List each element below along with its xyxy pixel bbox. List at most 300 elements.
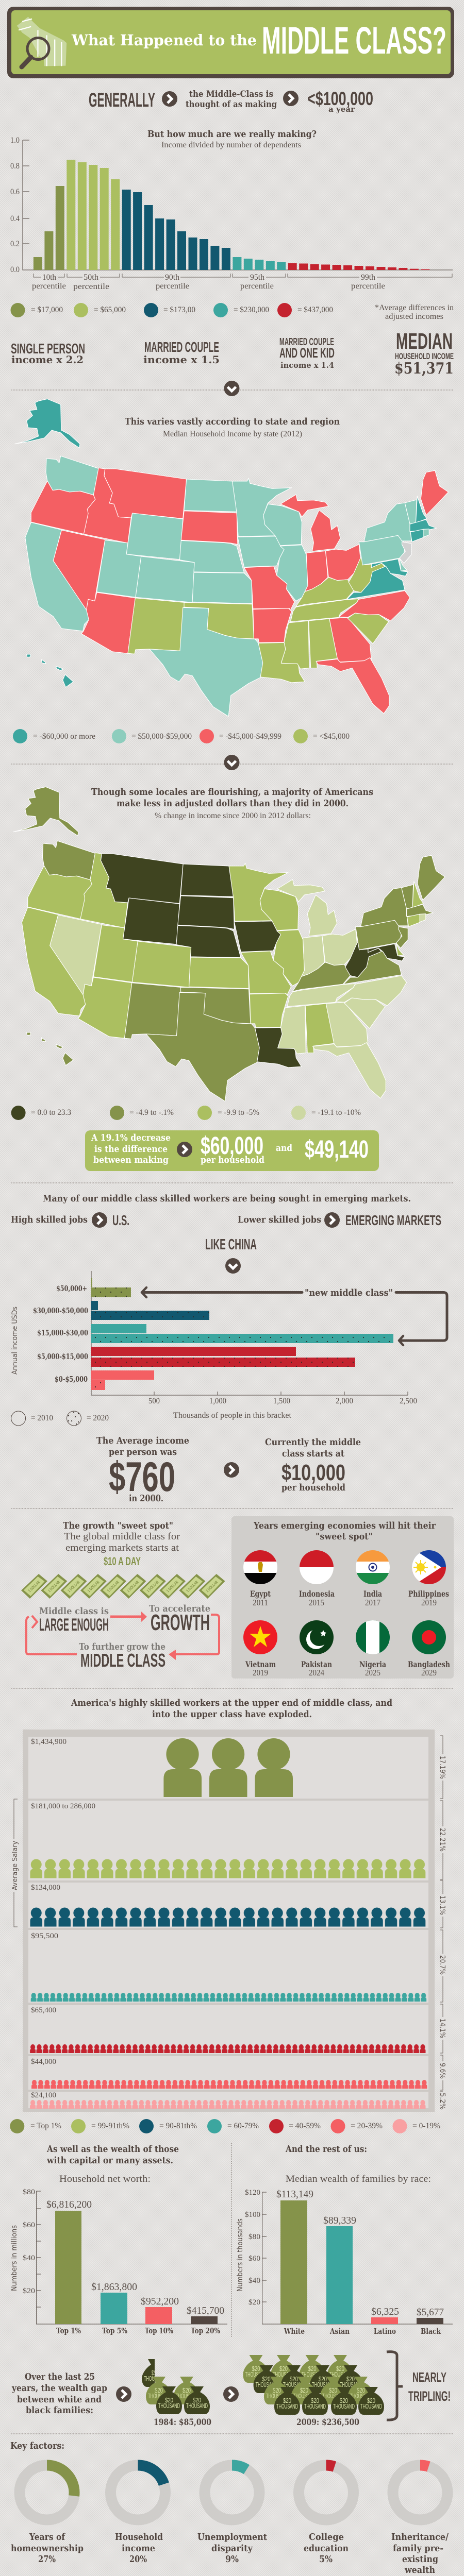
legend: percentile income: *Average differences in xyxy=(375,303,454,312)
salary brackets and percentages: 9.6% xyxy=(438,2063,446,2079)
icon: money bags 2009: THOUSAND xyxy=(340,2381,361,2388)
jobs comparison row: High skilled jobs xyxy=(11,1214,88,1225)
text: wealth gap intro xyxy=(11,2371,107,2416)
callout: 19.1 percent decrease: $60,000 xyxy=(201,1132,263,1160)
salary brackets and percentages xyxy=(11,1736,446,2110)
callout: 19.1 percent decrease: is the difference xyxy=(94,1144,168,1155)
flag: Philippines xyxy=(412,1550,446,1584)
bar chart: median wealth by race xyxy=(236,2144,453,2336)
bar chart: income percentiles: 0.8 xyxy=(10,162,20,171)
bar chart: income percentiles: 10th xyxy=(42,273,56,282)
icon: ten dollar bills: 1 DOLLAR xyxy=(27,1580,41,1593)
legend: state income: = <$45,000 xyxy=(313,732,350,741)
bar chart: China income brackets: $30,000-$50,000 xyxy=(33,1306,88,1315)
donut: household income: Household xyxy=(115,2532,163,2543)
legend: state income: = -$45,000-$49,999 xyxy=(219,732,281,741)
bar chart: China income brackets xyxy=(11,1271,417,1420)
growth cycle flow xyxy=(26,1603,219,1671)
growth cycle flow: MIDDLE CLASS xyxy=(80,1650,165,1671)
donut: unemployment disparity: 9% xyxy=(225,2554,239,2565)
icon: money bags 2009: $20 xyxy=(308,2365,317,2372)
icon: money bags 2009: $20 xyxy=(346,2375,355,2383)
icon: money bags 1984: THOUSAND xyxy=(158,2402,180,2410)
header banner xyxy=(7,7,454,78)
icon: money bags 2009: THOUSAND xyxy=(283,2381,305,2388)
definition row: generally under 100k xyxy=(89,88,373,114)
donut: college education: College xyxy=(309,2532,344,2543)
icon: money bags 2009: THOUSAND xyxy=(293,2392,315,2400)
icon: money bags 2009: $20 xyxy=(311,2397,319,2404)
bar chart: income percentiles: percentile xyxy=(156,282,189,291)
household multipliers: income x 2.2 xyxy=(11,353,84,366)
bar chart: median wealth by race: Black xyxy=(421,2327,441,2336)
icon: ten dollar bills: 1 DOLLAR xyxy=(67,1580,80,1593)
icon: money bags 2009: THOUSAND xyxy=(276,2402,298,2410)
icon: ten dollar bills: 1 DOLLAR xyxy=(47,1580,61,1593)
map: percent change in income xyxy=(13,787,445,1101)
bar chart: China income brackets: $0-$5,000 xyxy=(55,1375,88,1384)
legend: percent change: = -4.9 to -.1% xyxy=(129,1108,174,1117)
arrow: 760 to 10000 xyxy=(224,1462,239,1478)
heading: adjusted dollars: % change in income since 2000 in 2012 dollars: xyxy=(155,811,311,820)
icon: money bags 2009: THOUSAND xyxy=(266,2392,288,2400)
donut: household income: 20% xyxy=(129,2554,147,2565)
bar chart: household net worth: Top 20% xyxy=(191,2326,220,2335)
flag: Indonesia xyxy=(300,1550,334,1584)
donut: unemployment disparity xyxy=(197,2465,268,2565)
panel: emerging economies flags: Philippines xyxy=(408,1589,449,1599)
stat: average income 760: $760 xyxy=(109,1454,175,1500)
text: wealth gap intro: between white and xyxy=(17,2394,102,2405)
legend: 2010 and 2020: = 2010 xyxy=(31,1414,53,1422)
icon: money bags 2009: THOUSAND xyxy=(256,2381,277,2388)
panel: emerging economies flags: Nigeria xyxy=(359,1659,386,1669)
salary brackets and percentages: 5.2% xyxy=(438,2093,446,2110)
bar chart: China income brackets: 2,500 xyxy=(400,1397,417,1405)
bar chart: China income brackets: Annual income USDs xyxy=(11,1307,19,1375)
bar chart: median wealth by race: $40 xyxy=(248,2277,260,2285)
donut: inheritance: existing xyxy=(402,2554,438,2565)
icon: money bags 1984 xyxy=(142,2359,211,2428)
panel: emerging economies flags: 2019 xyxy=(421,1598,437,1607)
icon: money bags 1984: $20 xyxy=(193,2396,201,2404)
icon: ten dollar bills: 1 DOLLAR xyxy=(185,1580,199,1593)
legend: salary percentiles: = 90-81th% xyxy=(159,2122,197,2130)
donut: inheritance: Inheritance/ xyxy=(391,2532,449,2543)
jobs comparison row: U.S. xyxy=(112,1212,129,1228)
salary brackets and percentages: 14.1% xyxy=(438,2019,446,2038)
heading: state and region: Median Household Income by state (2012) xyxy=(163,430,302,438)
legend: percent change: = -9.9 to -5% xyxy=(218,1108,259,1117)
heading: adjusted dollars: make less in adjusted dollars than they did in 2000. xyxy=(117,798,349,809)
bar chart: household net worth: Household net worth: xyxy=(59,2174,151,2184)
panel: sweet spot growth: The growth "sweet spot" xyxy=(63,1520,173,1531)
icon: money bags 2009: THOUSAND xyxy=(333,2402,355,2410)
bar chart: household net worth: Top 5% xyxy=(102,2326,127,2335)
panel: salary pictogram: $134,000 xyxy=(31,1884,60,1892)
panel: emerging economies flags xyxy=(231,1516,454,1679)
bar chart: household net worth: As well as the wealth of those xyxy=(46,2144,179,2155)
bar chart: median wealth by race: $5,677 xyxy=(417,2307,444,2318)
heading: how much are we making xyxy=(147,129,317,149)
icon: money bags 2009: $20 xyxy=(336,2365,344,2372)
legend: percentile income: = $437,000 xyxy=(297,306,333,314)
text: wealth gap intro: Over the last 25 xyxy=(25,2371,95,2382)
map: median household income by state xyxy=(15,399,449,717)
bar chart: income percentiles: percentile xyxy=(32,282,66,291)
panel: sweet spot growth xyxy=(21,1520,225,1671)
bar chart: income percentiles: percentile xyxy=(73,282,109,291)
panel: salary pictogram: $1,434,900 xyxy=(31,1738,67,1746)
legend: state income: = $50,000-$59,000 xyxy=(131,732,192,741)
icon: ten dollar bills xyxy=(21,1574,225,1599)
bar chart: China income brackets: 1,000 xyxy=(209,1397,226,1405)
panel: emerging economies flags: India xyxy=(363,1589,382,1599)
panel: emerging economies flags: 2019 xyxy=(253,1668,268,1677)
icon: money bags 2009: THOUSAND xyxy=(322,2392,344,2400)
icon: top 1 percent people xyxy=(163,1738,293,1797)
household multipliers xyxy=(11,329,454,378)
heading: how much are we making: But how much are we really making? xyxy=(147,129,317,140)
heading: key factors: Key factors: xyxy=(10,2441,64,2451)
icon: money bags 2009: $20 xyxy=(290,2375,298,2383)
icon: money bags 2009: $20 xyxy=(252,2365,260,2372)
icon: money bags 1984: $2 xyxy=(152,2369,155,2377)
title: What Happened to the xyxy=(71,31,257,49)
bar chart: China income brackets: $15,000-$30,00 xyxy=(37,1328,88,1337)
bar chart: income percentiles: 90th xyxy=(165,273,179,282)
flag: Nigeria xyxy=(356,1620,390,1654)
panel: emerging economies flags: 2024 xyxy=(309,1668,324,1677)
legend: percentile income: = $230,000 xyxy=(234,306,269,314)
arrow: to 1984 xyxy=(116,2386,131,2402)
flag: Pakistan xyxy=(300,1620,334,1654)
panel: salary pictogram: $65,400 xyxy=(31,2006,56,2014)
donut: inheritance: wealth xyxy=(404,2565,435,2575)
definition row: generally under 100k: GENERALLY xyxy=(89,89,155,111)
legend: percentile income: = $173,00 xyxy=(163,306,195,314)
bar chart: China income brackets: $5,000-$15,000 xyxy=(37,1352,88,1361)
definition row: generally under 100k: a year xyxy=(328,105,355,114)
legend: percentile income: = $17,000 xyxy=(31,306,63,314)
people rows by percentile xyxy=(29,1859,427,2109)
panel: salary pictogram: $44,000 xyxy=(31,2058,56,2066)
callout: 19.1 percent decrease: A 19.1% decrease xyxy=(91,1132,171,1143)
icon: money bags 2009: THOUSAND xyxy=(273,2370,294,2378)
icon: money bags 2009: $20 xyxy=(367,2397,375,2404)
text: wealth gap intro: years, the wealth gap xyxy=(11,2383,107,2394)
bar chart: household net worth: $952,200 xyxy=(141,2296,179,2307)
household multipliers: income x 1.4 xyxy=(280,361,334,370)
heading: emerging markets: Many of our middle class skilled workers are being sought in emerging markets. xyxy=(43,1193,411,1204)
bar chart: household net worth: $20 xyxy=(23,2287,35,2295)
donut: college education xyxy=(299,2465,354,2565)
flag: Egypt xyxy=(243,1550,277,1584)
stat: average income 760: The Average income xyxy=(96,1435,189,1446)
bar chart: median wealth by race: Latino xyxy=(374,2327,396,2336)
icon: money bags 1984: $20 xyxy=(165,2396,173,2404)
icon: money bags 2009: THOUSAND xyxy=(360,2402,382,2410)
bar chart: household net worth: $80 xyxy=(23,2188,35,2196)
salary brackets and percentages: 13.1% xyxy=(438,1895,446,1915)
donut: years of homeownership xyxy=(11,2465,84,2565)
panel: salary pictogram xyxy=(23,1730,435,2112)
icon: money bags 2009: $20 xyxy=(279,2365,288,2372)
bar chart: median wealth by race: White xyxy=(284,2327,305,2336)
callout: 19.1 percent decrease xyxy=(85,1130,379,1171)
bar chart: median wealth by race: Median wealth of families by race: xyxy=(286,2174,431,2184)
arrow: continue down 2 xyxy=(224,755,239,770)
bar chart: income percentiles: 99th xyxy=(361,273,375,282)
legend: percentile income xyxy=(10,303,454,321)
icon: money bags 2009: $20 xyxy=(273,2386,281,2394)
stat: middle class starts at 10000: class starts at xyxy=(282,1448,345,1459)
panel: emerging economies flags: Egypt xyxy=(250,1589,271,1599)
bar chart: household net worth: $415,700 xyxy=(187,2305,224,2316)
icon: money bags 1984: THOUSAND xyxy=(186,2402,208,2410)
panel: sweet spot growth: $10 A DAY xyxy=(104,1555,141,1568)
bar chart: income percentiles: 0.0 xyxy=(10,265,20,274)
panel: emerging economies flags: 2015 xyxy=(309,1598,324,1607)
icon: money bags 2009: THOUSAND xyxy=(302,2370,323,2378)
household multipliers: MARRIED COUPLE xyxy=(279,336,334,348)
bar chart: median wealth by race: $6,325 xyxy=(371,2306,399,2317)
salary brackets and percentages: 20.7% xyxy=(438,1955,446,1975)
icon: shirt and magnifier xyxy=(17,17,67,67)
panel: emerging economies flags: Indonesia xyxy=(299,1589,335,1599)
bar chart: income percentiles: 0.2 xyxy=(10,240,20,248)
panel: sweet spot growth: The global middle class for xyxy=(64,1531,180,1542)
icon: money bags 1984: $20 xyxy=(155,2386,163,2394)
legend: salary percentiles: = 60-79% xyxy=(227,2122,259,2130)
legend: state income: = -$60,000 or more xyxy=(33,732,95,741)
bar chart: household net worth: $6,816,200 xyxy=(46,2199,92,2210)
panel: emerging economies flags: 2011 xyxy=(253,1598,268,1607)
callout: 19.1 percent decrease: per household xyxy=(201,1155,264,1165)
bar chart: median wealth by race: $120 xyxy=(245,2189,260,2197)
heading: adjusted dollars: Though some locales are flourishing, a majority of Americans xyxy=(91,787,373,798)
bar chart: China income brackets: 1,500 xyxy=(273,1397,290,1405)
salary brackets and percentages: 17.19% xyxy=(438,1756,446,1779)
icon: money bags 2009: $20 xyxy=(283,2397,291,2404)
icon: money bags 2009: THOUSAND xyxy=(245,2370,267,2378)
heading: state and region xyxy=(125,416,340,438)
heading: highly skilled workers xyxy=(71,1698,392,1720)
icon: money bags 2009: THOUSAND xyxy=(312,2381,334,2388)
legend: salary percentiles: = 99-91th% xyxy=(91,2122,129,2130)
callout: 19.1 percent decrease: $49,140 xyxy=(305,1136,369,1163)
icon: ten dollar bills: 1 DOLLAR xyxy=(165,1580,179,1593)
growth cycle flow: To further grow the xyxy=(79,1641,165,1652)
bar chart: household net worth: $40 xyxy=(23,2254,35,2262)
donut: years of homeownership: 27% xyxy=(38,2554,56,2565)
arrow: new middle class: "new middle class" xyxy=(305,1287,393,1298)
household multipliers: SINGLE PERSON xyxy=(11,341,85,357)
bar chart: median wealth by race: $113,149 xyxy=(276,2189,313,2200)
bar chart: income percentiles: 50th xyxy=(84,273,98,282)
donut: years of homeownership: Years of xyxy=(29,2532,65,2543)
bar chart: China income brackets: 2,000 xyxy=(336,1397,353,1405)
icon: ten dollar bills: 1 DOLLAR xyxy=(126,1580,140,1593)
definition row: generally under 100k: thought of as making xyxy=(186,99,277,110)
legend: salary percentiles: = Top 1% xyxy=(30,2122,61,2130)
icon: ten dollar bills: 1 DOLLAR xyxy=(87,1580,101,1593)
panel: sweet spot growth: emerging markets starts at xyxy=(65,1543,179,1553)
legend: salary percentiles: = 40-59% xyxy=(289,2122,321,2130)
icon: money bags 2009: $20 xyxy=(300,2386,308,2394)
panel: emerging economies flags: Pakistan xyxy=(301,1659,332,1669)
definition row: generally under 100k: <$100,000 xyxy=(307,88,373,109)
callout: 19.1 percent decrease: between making xyxy=(93,1155,169,1165)
icon: money bags 2009: THOUSAND xyxy=(304,2402,326,2410)
icon: money bags 2009: $20 xyxy=(340,2397,348,2404)
icon: money bags 1984: THOUSAND xyxy=(148,2392,170,2400)
bar chart: household net worth xyxy=(10,2144,227,2335)
donut: inheritance: family pre- xyxy=(393,2543,443,2554)
donut: household income xyxy=(110,2465,165,2565)
arrow: new middle class xyxy=(142,1287,447,1345)
donut: inheritance xyxy=(391,2465,449,2576)
bar chart: median wealth by race: $60 xyxy=(248,2255,260,2263)
icon: money bags 2009: THOUSAND xyxy=(350,2392,372,2400)
legend: salary percentiles: = 20-39% xyxy=(351,2122,383,2130)
bar chart: household net worth: Top 10% xyxy=(145,2326,173,2335)
icon: ten dollar bills: 1 DOLLAR xyxy=(106,1580,120,1593)
donut: unemployment disparity: disparity xyxy=(211,2543,253,2554)
bar chart: household net worth: Top 1% xyxy=(56,2326,81,2335)
icon: money bags 1984: THOU xyxy=(144,2375,155,2382)
icon: money bags 1984: $20 xyxy=(183,2386,191,2394)
bar chart: income percentiles: percentile xyxy=(240,282,274,291)
panel: emerging economies flags: 2029 xyxy=(421,1668,437,1677)
panel: emerging economies flags: 2017 xyxy=(365,1598,380,1607)
icon: ten dollar bills: 1 DOLLAR xyxy=(205,1580,219,1593)
stat: middle class starts at 10000 xyxy=(265,1437,361,1493)
household multipliers: MARRIED COUPLE xyxy=(144,339,219,355)
legend: percent change: = 0.0 to 23.3 xyxy=(31,1108,71,1117)
icon: money bags 1984: THOUSAND xyxy=(176,2392,197,2400)
growth cycle flow: To accelerate xyxy=(149,1603,210,1614)
bar chart: household net worth: $1,863,800 xyxy=(91,2281,137,2293)
household multipliers: AND ONE KID xyxy=(279,345,335,361)
legend: 2010 and 2020: = 2020 xyxy=(87,1414,109,1422)
panel: emerging economies flags: Vietnam xyxy=(245,1659,276,1669)
bar chart: median wealth by race: $100 xyxy=(245,2211,260,2219)
donut: years of homeownership: homeownership xyxy=(11,2543,84,2554)
bar chart: income percentiles: 0.4 xyxy=(10,214,20,223)
heading: highly skilled workers: America's highly skilled workers at the upper end of middle class, and xyxy=(71,1698,392,1708)
bar chart: median wealth by race: And the rest of us: xyxy=(285,2144,367,2155)
donut: unemployment disparity: Unemployment xyxy=(197,2532,268,2543)
flag: Vietnam xyxy=(243,1620,277,1654)
bar chart: China income brackets: $50,000+ xyxy=(56,1284,87,1293)
flag: Bangladesh xyxy=(412,1620,446,1654)
text: wealth gap intro: black families: xyxy=(26,2405,93,2416)
legend: 2010 and 2020 xyxy=(11,1411,109,1426)
arrow: to 2009 xyxy=(223,2386,239,2402)
bar chart: income percentiles: 1.0 xyxy=(10,136,20,145)
panel: salary pictogram: $24,100 xyxy=(31,2091,56,2099)
panel: emerging economies flags: "sweet spot" xyxy=(316,1531,373,1542)
jobs comparison row xyxy=(11,1212,441,1274)
flag: India xyxy=(356,1550,390,1584)
donut: college education: 5% xyxy=(319,2554,333,2565)
bar chart: income percentiles: 95th xyxy=(250,273,264,282)
legend: percent change xyxy=(11,1106,361,1120)
bar chart: median wealth by race: Asian xyxy=(329,2327,350,2336)
icon: money bags 2009: $20 xyxy=(357,2386,365,2394)
definition row: generally under 100k: the Middle-Class is xyxy=(189,89,273,99)
panel: emerging economies flags: Bangladesh xyxy=(408,1659,450,1669)
icon: money bags 2009: $20 xyxy=(319,2375,327,2383)
bar chart: median wealth by race: Numbers in thousands xyxy=(236,2218,244,2292)
bar chart: income percentiles: 0.6 xyxy=(10,188,20,196)
household multipliers: $51,371 xyxy=(394,360,454,378)
bar chart: median wealth by race: $80 xyxy=(248,2233,260,2241)
legend: salary percentiles xyxy=(10,2119,440,2133)
legend: salary percentiles: = 0-19% xyxy=(412,2122,440,2130)
stat: average income 760 xyxy=(96,1435,189,1504)
jobs comparison row: LIKE CHINA xyxy=(205,1236,257,1253)
heading: highly skilled workers: into the upper class have exploded. xyxy=(152,1709,312,1720)
bar chart: China income brackets: Thousands of people in this bracket xyxy=(173,1411,292,1420)
panel: salary pictogram: $95,500 xyxy=(31,1932,58,1940)
stat: middle class starts at 10000: per household xyxy=(281,1482,345,1493)
jobs comparison row: Lower skilled jobs xyxy=(238,1214,321,1225)
panel: salary pictogram: $181,000 to 286,000 xyxy=(31,1802,95,1810)
bar chart: median wealth by race: $89,339 xyxy=(323,2215,356,2226)
stat: middle class starts at 10000: Currently the middle xyxy=(265,1437,361,1448)
bar chart: income percentiles xyxy=(10,136,453,291)
household multipliers: income x 1.5 xyxy=(143,353,220,366)
panel: emerging economies flags: Years emerging economies will hit their xyxy=(253,1520,436,1531)
icon: money bags 2009: $20 xyxy=(262,2375,271,2383)
legend: percentile income: adjusted incomes xyxy=(385,312,443,321)
heading: adjusted dollars xyxy=(91,787,373,820)
heading: how much are we making: Income divided by number of dependents xyxy=(161,141,301,149)
stat: average income 760: in 2000. xyxy=(129,1493,163,1504)
growth cycle flow: Middle class is xyxy=(39,1606,109,1617)
bar chart: income percentiles: percentile xyxy=(351,282,385,291)
legend: percent change: = -19.1 to -10% xyxy=(311,1108,361,1117)
heading: state and region: This varies vastly according to state and region xyxy=(125,416,340,427)
icon: money bags 2009: THOUSAND xyxy=(329,2370,351,2378)
panel: emerging economies flags: 2025 xyxy=(365,1668,380,1677)
icon: ten dollar bills: 1 DOLLAR xyxy=(146,1580,160,1593)
stat: average income 760: per person was xyxy=(109,1447,177,1458)
bracket: nearly tripling xyxy=(387,2352,451,2420)
callout: 19.1 percent decrease: and xyxy=(276,1143,292,1154)
stat: middle class starts at 10000: $10,000 xyxy=(281,1460,345,1485)
legend: percentile income: = $65,000 xyxy=(94,306,126,314)
bar chart: China income brackets: 500 xyxy=(148,1397,160,1405)
arrow: continue down xyxy=(224,381,239,396)
growth cycle flow: LARGE ENOUGH xyxy=(39,1615,109,1635)
bar chart: household net worth: Numbers in millions xyxy=(10,2225,19,2291)
salary brackets and percentages: 22.21% xyxy=(438,1828,446,1852)
bar chart: median wealth by race: $20 xyxy=(248,2298,260,2307)
bar chart: household net worth: with capital or many assets. xyxy=(46,2155,173,2166)
salary brackets and percentages: Average Salary xyxy=(11,1841,19,1890)
legend: state income xyxy=(13,729,350,743)
icon: money bags 2009: $20 xyxy=(329,2386,337,2394)
growth cycle flow: GROWTH xyxy=(151,1610,210,1635)
icon: money bags 1984: 1984: $85,000 xyxy=(154,2417,211,2428)
donut: household income: income xyxy=(122,2543,155,2554)
donut: college education: education xyxy=(304,2543,349,2554)
title xyxy=(71,19,446,62)
icon: money bags 2009: 2009: $236,500 xyxy=(296,2417,359,2428)
